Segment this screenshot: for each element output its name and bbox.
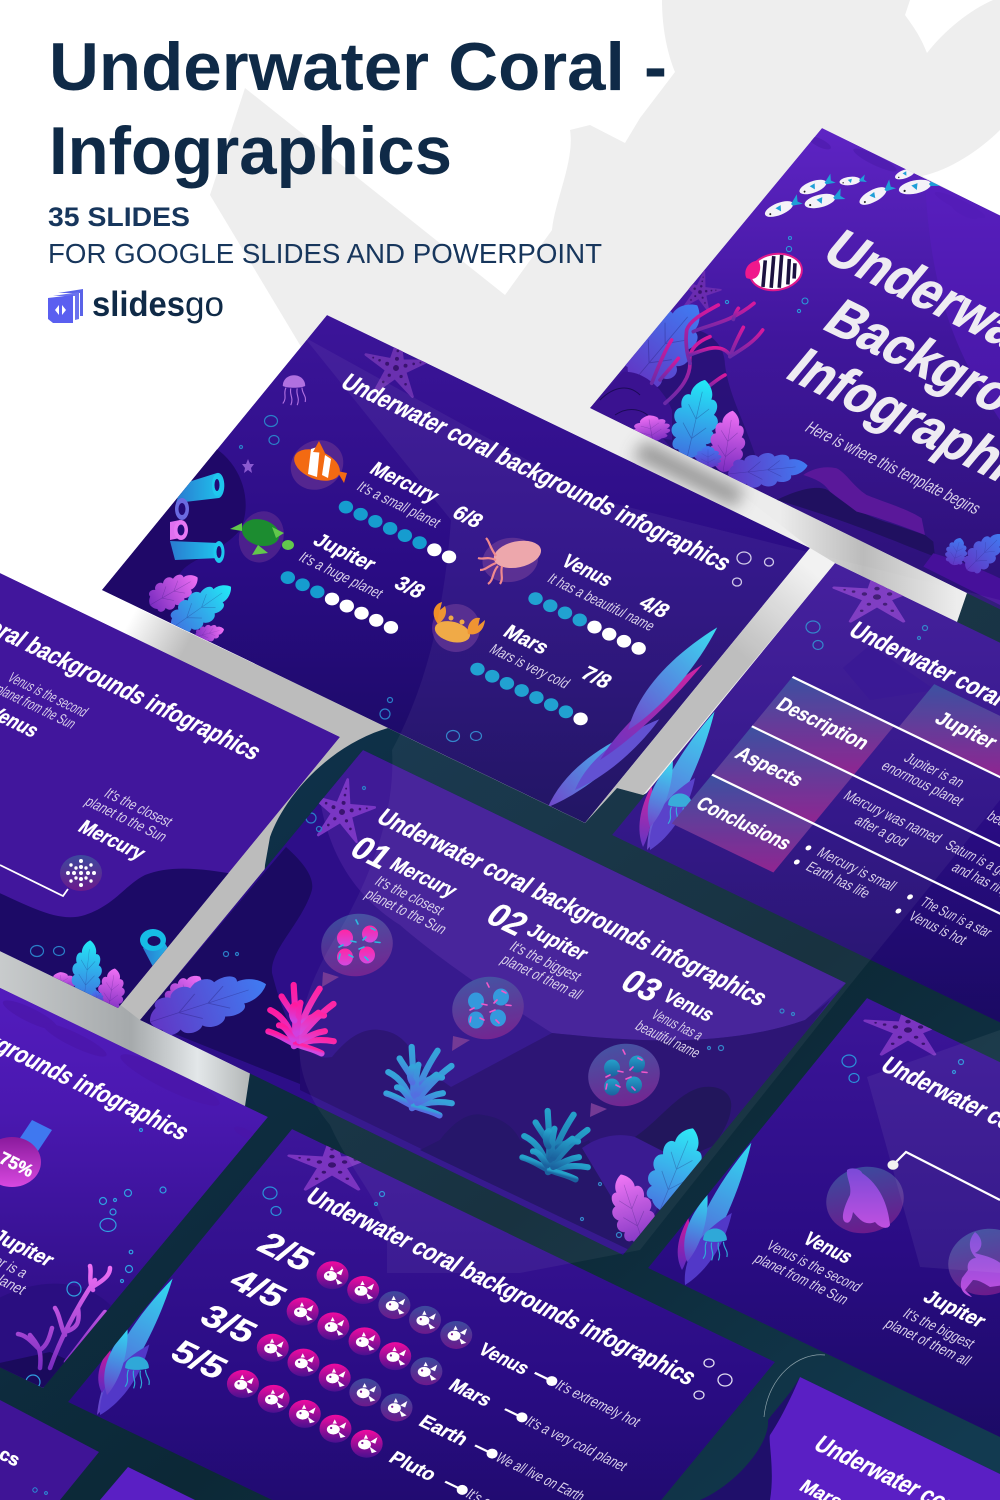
Jupiter node [942, 1222, 1000, 1302]
slide content [672, 611, 1000, 1039]
table cells: Venus is hot [905, 909, 970, 948]
slide H: Venus and Jupiter nodes [648, 998, 1000, 1500]
top patches [810, 137, 896, 172]
heading: Underwater coral backgrounds infographics [300, 1184, 702, 1391]
upper light band [320, 750, 846, 1040]
row: Mercury: Mercury [365, 458, 444, 507]
bottom blue leaf [728, 453, 808, 488]
starfish [289, 1135, 375, 1189]
row: Mars: 7/8 [576, 663, 616, 693]
slide D: three steps [140, 750, 846, 1255]
slide B: ratings with sea animals [90, 315, 810, 823]
bubble 3 [582, 1037, 666, 1113]
arc line [764, 1355, 825, 1417]
row: 3/5 Earth: Earth [415, 1411, 473, 1449]
row: Jupiter: 3/8 [389, 573, 430, 603]
slidesgo logo [48, 285, 224, 324]
jellyfish [668, 794, 692, 825]
top patches [0, 996, 258, 1142]
heading: Underwater coral backgrounds infographics [335, 370, 737, 577]
subtitle [48, 202, 602, 269]
step 03 [596, 962, 736, 1062]
slide F: percentage chart [0, 884, 268, 1390]
75 percent badge [0, 1137, 41, 1187]
table cells: Jupiter is an [900, 751, 967, 791]
main title: Infographics [49, 113, 452, 189]
teal coral [517, 1104, 600, 1182]
jellyfish [283, 375, 306, 405]
main title [49, 29, 667, 189]
row: Jupiter [280, 534, 426, 634]
dark wave [0, 869, 240, 1010]
pink leaf [710, 410, 746, 472]
crab icon [432, 602, 485, 652]
jellyfish [703, 1229, 727, 1260]
row: 2/5 Venus: It's extremely hot [551, 1378, 644, 1430]
step 02 [461, 896, 618, 1003]
slide K: partial bottom [100, 1467, 195, 1500]
slide I: partial bottom-right [700, 1355, 1000, 1500]
slide content [0, 939, 195, 1310]
feathers [636, 706, 722, 854]
slide content [0, 559, 267, 875]
feathers [86, 1272, 180, 1419]
bubbles [842, 1055, 964, 1082]
row: 5/5 Pluto: 5/5 [163, 1333, 236, 1386]
starfish [684, 270, 722, 310]
Venus node [820, 1160, 910, 1240]
cyan leaf [672, 380, 718, 458]
tube [140, 929, 178, 980]
bubbles [30, 946, 64, 956]
cyan leaf [638, 1119, 715, 1219]
step 02: 02 [479, 896, 536, 942]
heading: Underwater coral backgrounds infographics [371, 805, 773, 1012]
Jupiter labels: Jupiter [918, 1286, 991, 1332]
row header: Description [752, 677, 894, 775]
lighter right panel [925, 178, 1000, 420]
step 03: 03 [613, 962, 671, 1009]
step 02: planet of them all [497, 952, 586, 1003]
row: Mercury: 6/8 [447, 502, 488, 533]
step 03: Venus [658, 985, 719, 1026]
slide J: partial bottom-left [0, 1400, 99, 1500]
row header: Conclusions [672, 775, 814, 873]
zebra fish [745, 252, 803, 292]
pink leaf behind [155, 966, 213, 1026]
magenta coral branches [652, 303, 763, 403]
clownfish icon [290, 440, 347, 490]
dark left region [140, 847, 340, 1100]
rock [590, 372, 672, 440]
feathers [674, 1137, 759, 1289]
row: 5/5 Pluto [161, 1333, 565, 1500]
row: Jupiter: It's a huge planet [295, 550, 386, 602]
Venus labels: planet from the Sun [750, 1251, 852, 1308]
step 01 [324, 829, 483, 938]
title text [786, 230, 1000, 514]
step 01: Mercury [385, 854, 462, 902]
small pink leaf [634, 415, 670, 441]
Mercury block: It's the closest [100, 786, 176, 830]
row: 4/5 Mars [220, 1262, 639, 1483]
turtle icon [230, 511, 294, 562]
pink leaf [602, 1168, 662, 1249]
Mercury block: Mercury [73, 816, 150, 864]
row: Mars [470, 624, 612, 726]
step 03: Venus has a [648, 1007, 707, 1044]
bubbles [240, 416, 482, 742]
header cell: Jupiter: Jupiter [930, 708, 1000, 753]
big blue leaf [143, 961, 273, 1045]
step 01: It's the closest [371, 874, 447, 919]
step 03: beautiful name [631, 1019, 704, 1062]
dark reef shade [658, 331, 755, 470]
table cells: Mercury is small [813, 845, 900, 895]
row: Venus: Venus [557, 551, 618, 591]
Venus block [0, 670, 91, 754]
blue coral [381, 1040, 464, 1118]
small blue leaf [695, 446, 721, 468]
slidesgo logo: go [185, 285, 224, 324]
slide C: timeline [0, 573, 340, 1008]
slidesgo logo: slides [92, 285, 185, 324]
Mercury block: planet to the Sun [81, 794, 170, 845]
table cells: enormous planet [877, 759, 967, 810]
background silhouette [210, 0, 1000, 800]
slide A shadow [632, 440, 745, 508]
row: 5/5 Pluto: Pluto [385, 1448, 441, 1485]
coral branches [18, 1266, 110, 1368]
table cells: Earth has life [802, 859, 873, 902]
bar [12, 1120, 52, 1160]
corner leaves [945, 538, 968, 566]
row: 4/5 Mars: It's a very cold planet [521, 1414, 630, 1475]
row: Jupiter: Jupiter [308, 529, 381, 575]
leaves [45, 971, 77, 993]
starfish [306, 774, 379, 844]
row: 2/5 Venus: 2/5 [250, 1225, 323, 1278]
main title: Underwater Coral - [49, 29, 667, 105]
starfish [364, 347, 427, 398]
table cells: after a god [851, 813, 911, 850]
jellyfish [125, 1357, 149, 1388]
step 01: 01 [343, 829, 400, 875]
slide content [280, 373, 730, 726]
row: Venus [528, 553, 670, 655]
dark hill [635, 1087, 731, 1160]
small star [242, 459, 254, 473]
step 02: Jupiter [522, 920, 593, 965]
step 02: It's the biggest [506, 939, 585, 985]
Venus labels [750, 1217, 882, 1309]
row: Mercury: It's a small planet [353, 479, 444, 531]
row: Venus: 4/8 [634, 592, 674, 623]
Venus labels: Venus [798, 1228, 858, 1268]
lower dark field [300, 1000, 830, 1255]
row: Venus: It has a beautiful name [544, 571, 658, 635]
Jupiter label [0, 1221, 59, 1300]
table cells: Mercury was named [840, 788, 945, 847]
bubbles [806, 621, 928, 650]
Venus labels: Venus is the second [762, 1238, 865, 1295]
Jupiter labels [881, 1280, 1000, 1369]
purple stump and dark band [777, 467, 1000, 607]
bubbles [725, 236, 808, 313]
Jupiter labels: planet of them all [881, 1316, 974, 1369]
pink coral [263, 978, 346, 1056]
row: Mars: Mars is very cold [485, 642, 573, 692]
row: 3/5 Earth [191, 1297, 597, 1500]
seaweed feathers [548, 742, 612, 806]
bubble 2 [446, 970, 530, 1046]
Jupiter labels: It's the biggest [899, 1306, 978, 1352]
dark teal backdrop [0, 593, 1000, 1500]
translucent overlay on right slide [867, 1030, 1000, 1273]
slide A: title slide [590, 128, 1000, 658]
dark panel [843, 645, 935, 700]
dark mound [0, 1284, 115, 1390]
table cells [787, 740, 1000, 957]
blue leaf [625, 304, 700, 387]
row header: Aspects [712, 726, 853, 824]
gutters between slides [0, 462, 967, 1108]
row: 3/5 Earth: 3/5 [193, 1297, 265, 1350]
fish school [764, 169, 940, 217]
corner leaves [149, 574, 198, 612]
bubbles [26, 1128, 166, 1389]
row: 2/5 Venus: Venus [474, 1339, 534, 1378]
subtitle: FOR GOOGLE SLIDES AND POWERPOINT [48, 238, 602, 269]
row: 4/5 Mars: 4/5 [222, 1262, 295, 1314]
row: Mercury [338, 462, 484, 564]
Venus block: Venus is the second [4, 670, 91, 720]
row header: Description: Description [771, 694, 874, 754]
bubble 1 [315, 907, 399, 983]
header cell: Jupiter [898, 684, 1000, 776]
slide content [726, 1053, 1000, 1440]
squid icon [478, 537, 542, 585]
slide content [323, 805, 773, 1069]
bubbles [263, 1187, 384, 1216]
row: 4/5 Mars: Mars [445, 1375, 497, 1410]
tubes [170, 473, 224, 563]
starfish [834, 567, 920, 621]
row header: Conclusions: Conclusions [691, 793, 796, 855]
subtitle: 35 SLIDES [48, 202, 190, 232]
row: 2/5 Venus [249, 1225, 652, 1439]
table rules [712, 677, 1000, 990]
connector line [0, 865, 68, 896]
row: Mars: Mars [498, 621, 554, 659]
connector line [888, 1152, 1000, 1200]
purple hill [582, 1135, 680, 1245]
translucent silhouette overlay [299, 337, 1000, 1273]
step 01: planet to the Sun [361, 887, 450, 938]
Mercury block [63, 782, 181, 867]
slide G: icon ratings [68, 1129, 775, 1500]
slide content [159, 1181, 705, 1500]
hump [420, 1114, 640, 1255]
bubbles [224, 786, 794, 1238]
dark blob [102, 449, 246, 631]
row header: Aspects: Aspects [730, 743, 808, 791]
slide E: comparison table [612, 563, 1000, 1068]
pointers [322, 972, 339, 987]
icon: snowflake bubble [60, 855, 102, 891]
starfish [865, 1000, 951, 1054]
